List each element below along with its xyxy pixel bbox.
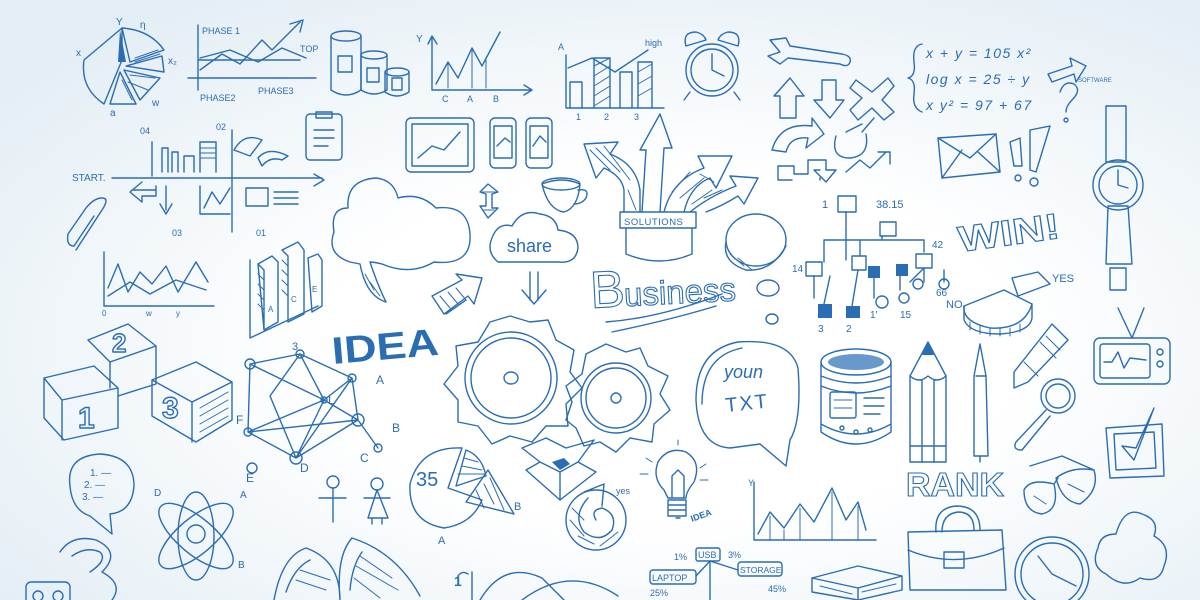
icon: atom: B: [238, 560, 245, 571]
icon: open book: [274, 538, 420, 600]
icon: atom: A: [240, 490, 247, 501]
chart: curve bottom: 1: [454, 573, 462, 589]
chart: axis line chart: B: [493, 94, 499, 104]
chart: org tree: 15: [900, 310, 912, 321]
icon: watch: [1093, 106, 1143, 290]
network diagram: D: [300, 461, 309, 475]
network diagram: E: [246, 471, 254, 485]
icon: checkbox: [1106, 408, 1164, 478]
icon: speech bubble list: 2. —: [84, 480, 105, 491]
icon: software arrow and question mark: SOFTWARE: [1078, 78, 1112, 84]
icon: glasses: [1024, 456, 1095, 514]
chart: org tree: 2: [846, 324, 852, 335]
icons: numbered cubes: 3: [162, 392, 179, 425]
icon: double arrow: [432, 274, 482, 314]
icon: small camera corner: [26, 582, 70, 600]
icon: exclamation marks: [1010, 126, 1050, 186]
icon: speech bubble list: 1. —: [90, 468, 111, 479]
chart: axis line chart: C: [442, 94, 449, 104]
chart: network storage: USB: [698, 550, 717, 560]
icon: stacked books: [812, 566, 902, 600]
text: RANK: RANK: [906, 466, 1004, 503]
chart: network storage: LAPTOP: [652, 573, 687, 583]
icon: share cloud: share: [507, 236, 552, 256]
icon: small down arrow: [480, 184, 498, 218]
icon: speech bubble list: 3. —: [82, 492, 103, 503]
icon: light bulb: [640, 440, 713, 524]
icon: gears: [444, 316, 670, 452]
icon: marker: [1014, 324, 1068, 388]
chart: wavy line chart: y: [176, 309, 180, 318]
icon: pie chart top left: [76, 17, 177, 119]
chart: network storage: 3%: [728, 550, 741, 560]
chart: org tree: [792, 196, 949, 335]
icon: alarm clock: [684, 32, 740, 100]
network diagram: B: [392, 421, 400, 435]
icon: magnifier: [1015, 379, 1075, 450]
icons: numbered cubes: 1: [78, 402, 95, 435]
icon: share cloud: [490, 212, 578, 304]
icon: pie chart top left: x₂: [168, 56, 177, 67]
chart: axis line chart: [416, 32, 532, 104]
icon: cloud tree: [1095, 512, 1166, 583]
network diagram: [236, 341, 400, 485]
chart: phase line chart: TOP: [300, 44, 318, 54]
chart: mountain line: Y: [748, 478, 754, 488]
chart: org tree: 14: [792, 264, 804, 275]
chart: wavy line chart: w: [145, 309, 152, 318]
icon: wall clock: [1015, 537, 1089, 600]
chart: yes no pie: [946, 272, 1074, 336]
chart: axis line chart: A: [467, 94, 473, 104]
chart: org tree: 1′: [870, 310, 878, 321]
icon: envelope: [938, 134, 1000, 178]
speech bubble: your TXT: TXT: [724, 391, 770, 417]
icon: wrench: [768, 38, 850, 66]
speech bubble: your TXT: [696, 342, 799, 466]
chart: network storage: STORAGE: [740, 565, 782, 575]
network diagram: C: [360, 451, 369, 465]
chart: pie 35: A: [438, 535, 446, 547]
chart: 3D bars: E: [312, 285, 317, 294]
icons: numbered cubes: 2: [112, 328, 126, 358]
icon: speech bubble list: [70, 454, 134, 534]
icon: solutions arrows: SOLUTIONS: [624, 217, 683, 228]
chart: bar chart: 3: [634, 112, 639, 122]
icon: solutions arrows: [584, 114, 758, 261]
icon: pie chart top left: x: [76, 48, 81, 59]
icon: big pencil: [910, 342, 946, 462]
icon: light bulb: IDEA: [689, 507, 713, 524]
panel: start diagram: [72, 122, 324, 238]
chart: 3D bars: C: [291, 295, 297, 304]
chart: yes no pie: NO: [946, 299, 963, 311]
heading: IDEA: IDEA: [330, 322, 440, 373]
icon: stick figures: [319, 476, 390, 524]
text: equations: x + y = 105 x²: [925, 45, 1032, 61]
text: equations: x y² = 97 + 67: [925, 97, 1033, 113]
icon: coffee cup: [542, 178, 587, 212]
chart: wavy line chart: 0: [102, 309, 107, 318]
chart: phase line chart: PHASE3: [258, 86, 294, 96]
icon: atom: D: [154, 488, 161, 499]
icon: spiral arrow: yes: [616, 486, 631, 496]
icon: pie chart top left: w: [151, 98, 160, 109]
icon: coin stacks: [331, 31, 409, 96]
chart: org tree: 1: [822, 199, 828, 211]
network diagram: A: [376, 373, 384, 387]
network diagram: L: [328, 393, 335, 407]
chart: bar chart: 2: [604, 112, 609, 122]
chart: bar chart: [558, 38, 664, 122]
icon: tv: [1094, 308, 1170, 384]
icon: open box: [522, 438, 596, 500]
chart: pie 35: 35: [416, 469, 438, 491]
chart: pie 35: [410, 448, 521, 547]
chart: network storage: 1%: [674, 552, 687, 562]
chart: pie 35: B: [514, 501, 521, 513]
icon: tin can: [821, 349, 891, 444]
text: equations: [908, 44, 1033, 113]
network diagram: F: [236, 413, 243, 427]
chart: phase line chart: PHASE 1: [202, 26, 240, 36]
chart: bar chart: A: [558, 42, 564, 52]
icon: thin pen: [974, 344, 988, 462]
icon: paper clip: [68, 198, 106, 250]
chart: 3D bars: [250, 242, 322, 338]
chart: network storage: 45%: [768, 584, 786, 594]
icon: clipboard: [306, 112, 342, 160]
panel: start diagram: START.: [72, 173, 106, 184]
icon: arrows group: [772, 78, 894, 182]
icon: tablet: [406, 118, 474, 172]
icon: pie chart top left: Y: [116, 17, 123, 28]
chart: phase line chart: PHASE2: [200, 93, 236, 103]
icon: number 3 outline: [60, 538, 116, 600]
icon: briefcase: [908, 506, 1006, 590]
text: WIN: WIN!: [955, 205, 1062, 260]
chart: network storage: 25%: [650, 588, 668, 598]
heading: Business: Business: [589, 254, 737, 320]
chart: bar chart: high: [645, 38, 662, 48]
chart: org tree: 66: [936, 288, 948, 299]
panel: start diagram: 01: [256, 228, 266, 238]
icon: thought cloud: [332, 178, 470, 302]
text: equations: log x = 25 ÷ y: [926, 71, 1031, 87]
chart: phase line chart: [188, 20, 318, 103]
icon: coins and pills: [725, 214, 786, 324]
chart: network storage: [650, 548, 786, 600]
panel: start diagram: 04: [140, 126, 150, 136]
chart: org tree: 38.15: [876, 199, 904, 211]
icons: numbered cubes: [44, 324, 232, 442]
chart: org tree: 42: [932, 240, 944, 251]
chart: org tree: 3: [818, 324, 824, 335]
speech bubble: your TXT: youn: [722, 362, 763, 382]
chart: curve bottom: [454, 572, 618, 600]
chart: axis line chart: Y: [416, 34, 423, 45]
panel: start diagram: 02: [216, 122, 226, 132]
icon: software arrow and question mark: [1048, 58, 1112, 122]
icon: pie chart top left: η: [140, 20, 146, 31]
icon: atom: [149, 488, 247, 580]
chart: 3D bars: A: [268, 305, 274, 314]
chart: mountain line: [748, 478, 876, 540]
network diagram: 3: [292, 341, 298, 353]
panel: start diagram: 03: [172, 228, 182, 238]
icon: phones: [490, 118, 552, 168]
chart: wavy line chart: [102, 252, 214, 318]
chart: bar chart: 1: [576, 112, 581, 122]
icon: pie chart top left: a: [110, 108, 116, 119]
chart: yes no pie: YES: [1052, 273, 1074, 285]
icon: spiral arrow: [566, 484, 631, 550]
